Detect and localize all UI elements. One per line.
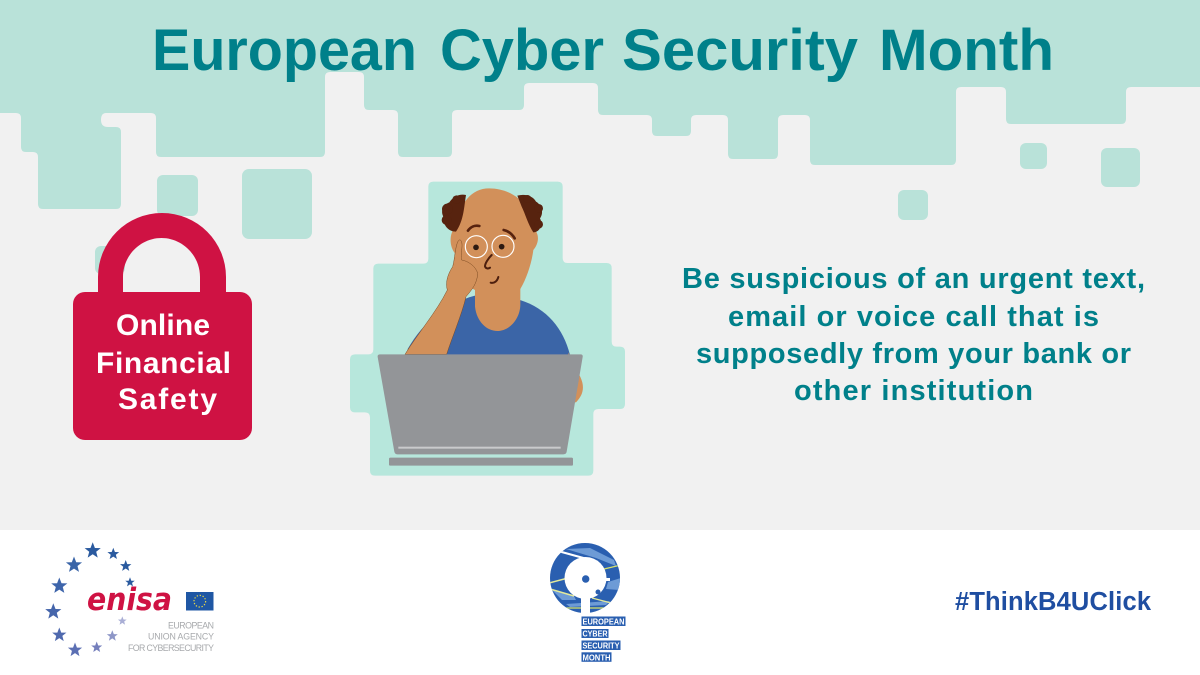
padlock label xyxy=(96,309,231,416)
padlock label: Online xyxy=(116,309,210,342)
right arm xyxy=(568,352,583,402)
illustration backdrop xyxy=(350,182,625,476)
ECSM label: SECURITY xyxy=(582,640,620,650)
illustration: man at laptop rubbing his eye xyxy=(350,182,625,476)
ENISA wordmark: enisa xyxy=(87,582,172,618)
tip text: other institution xyxy=(794,375,1033,407)
background: mint skyline banner xyxy=(0,0,1200,209)
padlock label: Financial xyxy=(96,347,231,380)
ECSM label: CYBER xyxy=(582,628,608,638)
ECSM globe xyxy=(549,543,621,617)
laptop base xyxy=(389,458,573,466)
nose and mouth xyxy=(485,255,498,283)
laptop highlight xyxy=(398,447,561,449)
icon: padlock shackle xyxy=(98,213,226,296)
tip text: email or voice call that is xyxy=(728,301,1099,333)
ENISA descriptor: FOR CYBERSECURITY xyxy=(128,643,214,653)
ECSM label: EUROPEAN xyxy=(582,616,624,626)
title: Month xyxy=(879,18,1054,83)
ENISA descriptor xyxy=(128,620,214,653)
logo: European Cyber Security Month xyxy=(549,543,626,662)
eyes xyxy=(473,244,504,250)
ECSM label xyxy=(582,616,626,662)
tip text: Be suspicious of an urgent text, xyxy=(682,263,1145,295)
ECSM label: MONTH xyxy=(582,652,610,662)
title: European xyxy=(152,18,417,83)
head and neck xyxy=(451,188,538,331)
shirt xyxy=(408,296,570,355)
title xyxy=(152,18,1054,83)
footer band xyxy=(0,530,1200,675)
laptop screen back xyxy=(378,354,583,454)
ENISA star ring xyxy=(45,542,135,656)
ENISA descriptor: UNION AGENCY xyxy=(148,632,214,642)
logo: ENISA xyxy=(45,542,214,656)
title: Security xyxy=(622,18,858,83)
title: Cyber xyxy=(440,18,604,83)
padlock label: Safety xyxy=(118,383,217,416)
hand and forearm xyxy=(405,240,478,354)
eyebrows xyxy=(468,226,515,238)
background: floating mint squares xyxy=(95,143,1140,274)
icon: EU flag xyxy=(186,592,214,610)
tip text: supposedly from your bank or xyxy=(696,338,1131,370)
hair left xyxy=(442,195,466,232)
icon: padlock body xyxy=(73,292,252,440)
tip text xyxy=(682,263,1145,407)
glasses xyxy=(465,235,514,258)
ENISA descriptor: EUROPEAN xyxy=(168,620,214,630)
hair right xyxy=(517,195,543,232)
panel: padlock badge xyxy=(73,213,252,440)
hashtag: #ThinkB4UClick xyxy=(955,588,1152,616)
